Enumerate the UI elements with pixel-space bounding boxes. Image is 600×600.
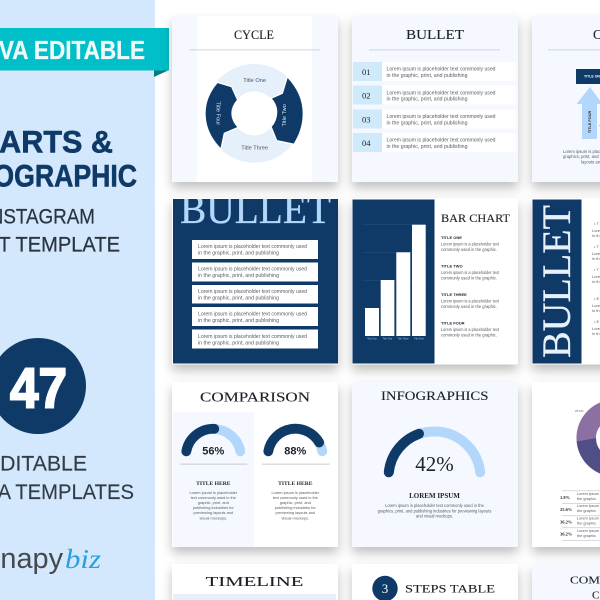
cropped bullet text: • E [594,319,600,324]
title: bar chart: BAR CHART [441,211,511,225]
donut chart [577,409,600,476]
table: Lorem ipsum [577,492,599,496]
row 04: 04 [362,138,371,148]
cycle diagram: Title Three [241,146,268,152]
entry: title four: commonly used in the graphic. [441,333,497,338]
left text [190,481,238,520]
card: navy bullet [172,186,338,364]
gauge: 42%: 42% [415,452,454,476]
subheading: instagram post template [0,206,120,257]
entry: title one: commonly used in the graphic. [441,247,497,252]
table: 25.6% [560,507,573,512]
gauge: 56% [186,429,240,457]
title: comparison: COMPARISON [200,390,310,405]
bar chart: Title One [367,338,377,340]
right text: visual mockups. [281,516,309,520]
cropped bullet text: • E [594,296,600,301]
entry: title one: Lorem ipsum is a placeholder text [441,242,500,247]
item 4: Lorem ipsum is placeholder text commonly used [198,312,307,318]
card: timeline [172,564,338,600]
text block: and visual mockups. [416,514,453,518]
right text: Lorem ipsum is placeholder [272,490,320,495]
gauge: 88%: 88% [284,445,307,457]
title: bullet: BULLET [180,186,331,232]
cropped bullet text: Lore [592,228,600,233]
cropped bullet text: • T [594,221,599,226]
bar chart: Title Three [397,338,409,340]
entry: title three [441,292,500,309]
right text [272,481,320,520]
item 1: Lorem ipsum is placeholder text commonly used [198,244,307,250]
item 1: in the graphic, print, and publishing [198,250,279,256]
bar chart [352,200,434,364]
title: bullet: BULLET [406,27,465,42]
text block: graphics, print, and publishing industries for previewing layouts [378,508,491,514]
title: timeline: TIMELINE [206,575,303,590]
cycle diagram: Title Four [215,101,221,125]
item 5: in the graphic, print, and publishing [198,340,279,346]
label: percent: 25.6% [575,409,584,413]
item 3: Lorem ipsum is placeholder text commonly used [198,289,307,295]
row 03: Lorem ipsum is placeholder text commonly used [386,114,496,120]
entry: title two: commonly used in the graphic. [441,276,497,281]
row 01: Lorem ipsum is placeholder text commonly used [386,66,496,72]
bar chart: Title Four [414,338,424,340]
row 02: Lorem ipsum is placeholder text commonly used [386,90,496,96]
row 04 [353,133,516,152]
entry: title two: TITLE TWO [441,264,463,268]
table: Lorem ipsum [577,529,599,533]
item 4 [192,307,318,326]
entry: title four: TITLE FOUR [441,320,465,326]
cropped bullet text [592,221,600,336]
gauge: 88% [268,429,322,457]
cropped bullet text: • T [594,267,599,272]
left text: graphic, print, and [198,500,229,505]
table: the graphic. [577,497,597,501]
badge: 47: 47 [10,356,67,420]
text: editable canva templates [0,453,134,504]
left text: text commonly used in the [191,495,236,500]
left text: Lorem ipsum is placeholder [190,490,238,495]
entry: title three: Lorem ipsum is a placeholder text [441,299,500,304]
row 01 [353,62,516,81]
title: cycle: CYCLE [234,27,274,42]
right text: graphic, print, and [280,500,311,505]
arrow: title four [576,87,600,139]
entry: title two: Lorem ipsum is a placeholder text [441,270,500,275]
right text: text commonly used in the [273,495,318,500]
bar chart: Title Two [383,338,393,340]
sidebar panel [0,0,169,600]
entry: title one: TITLE ONE [441,235,462,240]
text block: Lorem ipsum is placeholder text commonly used in the [385,503,485,508]
item 5: Lorem ipsum is placeholder text commonly used [198,334,307,340]
text block: LOREM IPSUM [409,492,460,500]
card: comparison [172,382,338,547]
cropped bullet text: in th [592,233,600,238]
logo: snapybiz: biz [65,544,102,574]
table: 1.8% [560,495,571,500]
cropped bullet text: Lore [592,274,600,279]
entry: title four [441,320,500,338]
cropped bullet text: in th [592,279,600,284]
left text: visual mockups. [199,516,227,520]
table [560,490,600,541]
title: steps table: STEPS TABLE [405,582,495,596]
badge: 3 [372,576,398,600]
card: infographics [352,382,518,547]
entry: title four: Lorem ipsum is a placeholder text [441,327,500,332]
right text: TITLE HERE [278,481,313,487]
card: vertical bullet [532,198,600,364]
row 02 [353,86,516,104]
title: cropped [570,574,600,600]
cropped bullet text: in th [592,331,600,336]
table: Lorem ipsum [577,504,599,508]
cropped bullet text: Lore [592,303,600,308]
item 2 [192,262,318,282]
entry: title three: TITLE THREE [441,292,467,297]
table: Lorem ipsum [577,516,599,520]
entry: title one [441,235,500,252]
text block [563,149,600,164]
table: 36.2% [560,520,573,524]
row 02: in the graphic, print, and publishing [386,96,468,102]
title: vertical bullet: BULLET [534,205,579,358]
row 03 [353,110,516,128]
title: infographics: INFOGRAPHICS [381,389,489,403]
card: bullet list [352,16,518,182]
table: the graphic. [577,534,597,538]
item 2: in the graphic, print, and publishing [198,273,279,279]
box: title one [576,69,600,84]
row 04: in the graphic, print, and publishing [386,144,468,150]
cropped bullet text: in th [592,308,600,313]
arrow: title four: TITLE FOUR [588,111,592,133]
cropped bullet text: • T [594,244,599,249]
logo: snapybiz [0,543,102,575]
item 5 [192,330,318,348]
item 3 [192,285,318,304]
table: the graphic. [577,522,597,526]
card: cropped chart [532,16,600,182]
badge: 47 [0,338,86,434]
left text: TITLE HERE [196,481,231,487]
entry: title three: commonly used in the graphic. [441,304,497,309]
row 01: 01 [362,67,370,77]
cropped bullet text: Lore [592,326,600,331]
title: cropped: COM [570,574,600,586]
text block [378,492,491,518]
row 04: Lorem ipsum is placeholder text commonly used [386,138,496,144]
row 03: in the graphic, print, and publishing [386,120,468,126]
gauge: 56%: 56% [202,445,225,457]
table: the graphic. [577,509,597,513]
right text: publishing industries for [275,505,316,510]
heading: charts and infographic [0,124,137,194]
left text: publishing industries for [193,505,234,510]
card: bar chart [352,198,518,364]
item 4: in the graphic, print, and publishing [198,318,279,324]
cycle diagram: Title Two [282,104,288,126]
card: cycle [172,16,338,182]
card: donut chart [532,382,600,547]
table: 36.2% [560,532,573,536]
cycle diagram [205,77,303,152]
card: comparison chart cropped [532,564,600,600]
gauge: 42% [389,432,480,476]
row 03: 03 [362,114,370,124]
item 2: Lorem ipsum is placeholder text commonly used [198,266,307,272]
row 02: 02 [362,90,370,100]
row 01: in the graphic, print, and publishing [386,73,468,79]
right text: previewing layouts and [276,510,315,515]
left text: previewing layouts and [194,510,233,515]
card: steps table [352,564,518,600]
cycle diagram: Title One [243,78,266,84]
ribbon: Canva editable [0,28,169,77]
cropped bullet text: Lore [592,251,600,256]
entry: title two [441,264,500,281]
cropped bullet text: in th [592,256,600,261]
item 1 [192,240,318,259]
item 3: in the graphic, print, and publishing [198,296,279,302]
badge: 3: 3 [382,581,388,596]
